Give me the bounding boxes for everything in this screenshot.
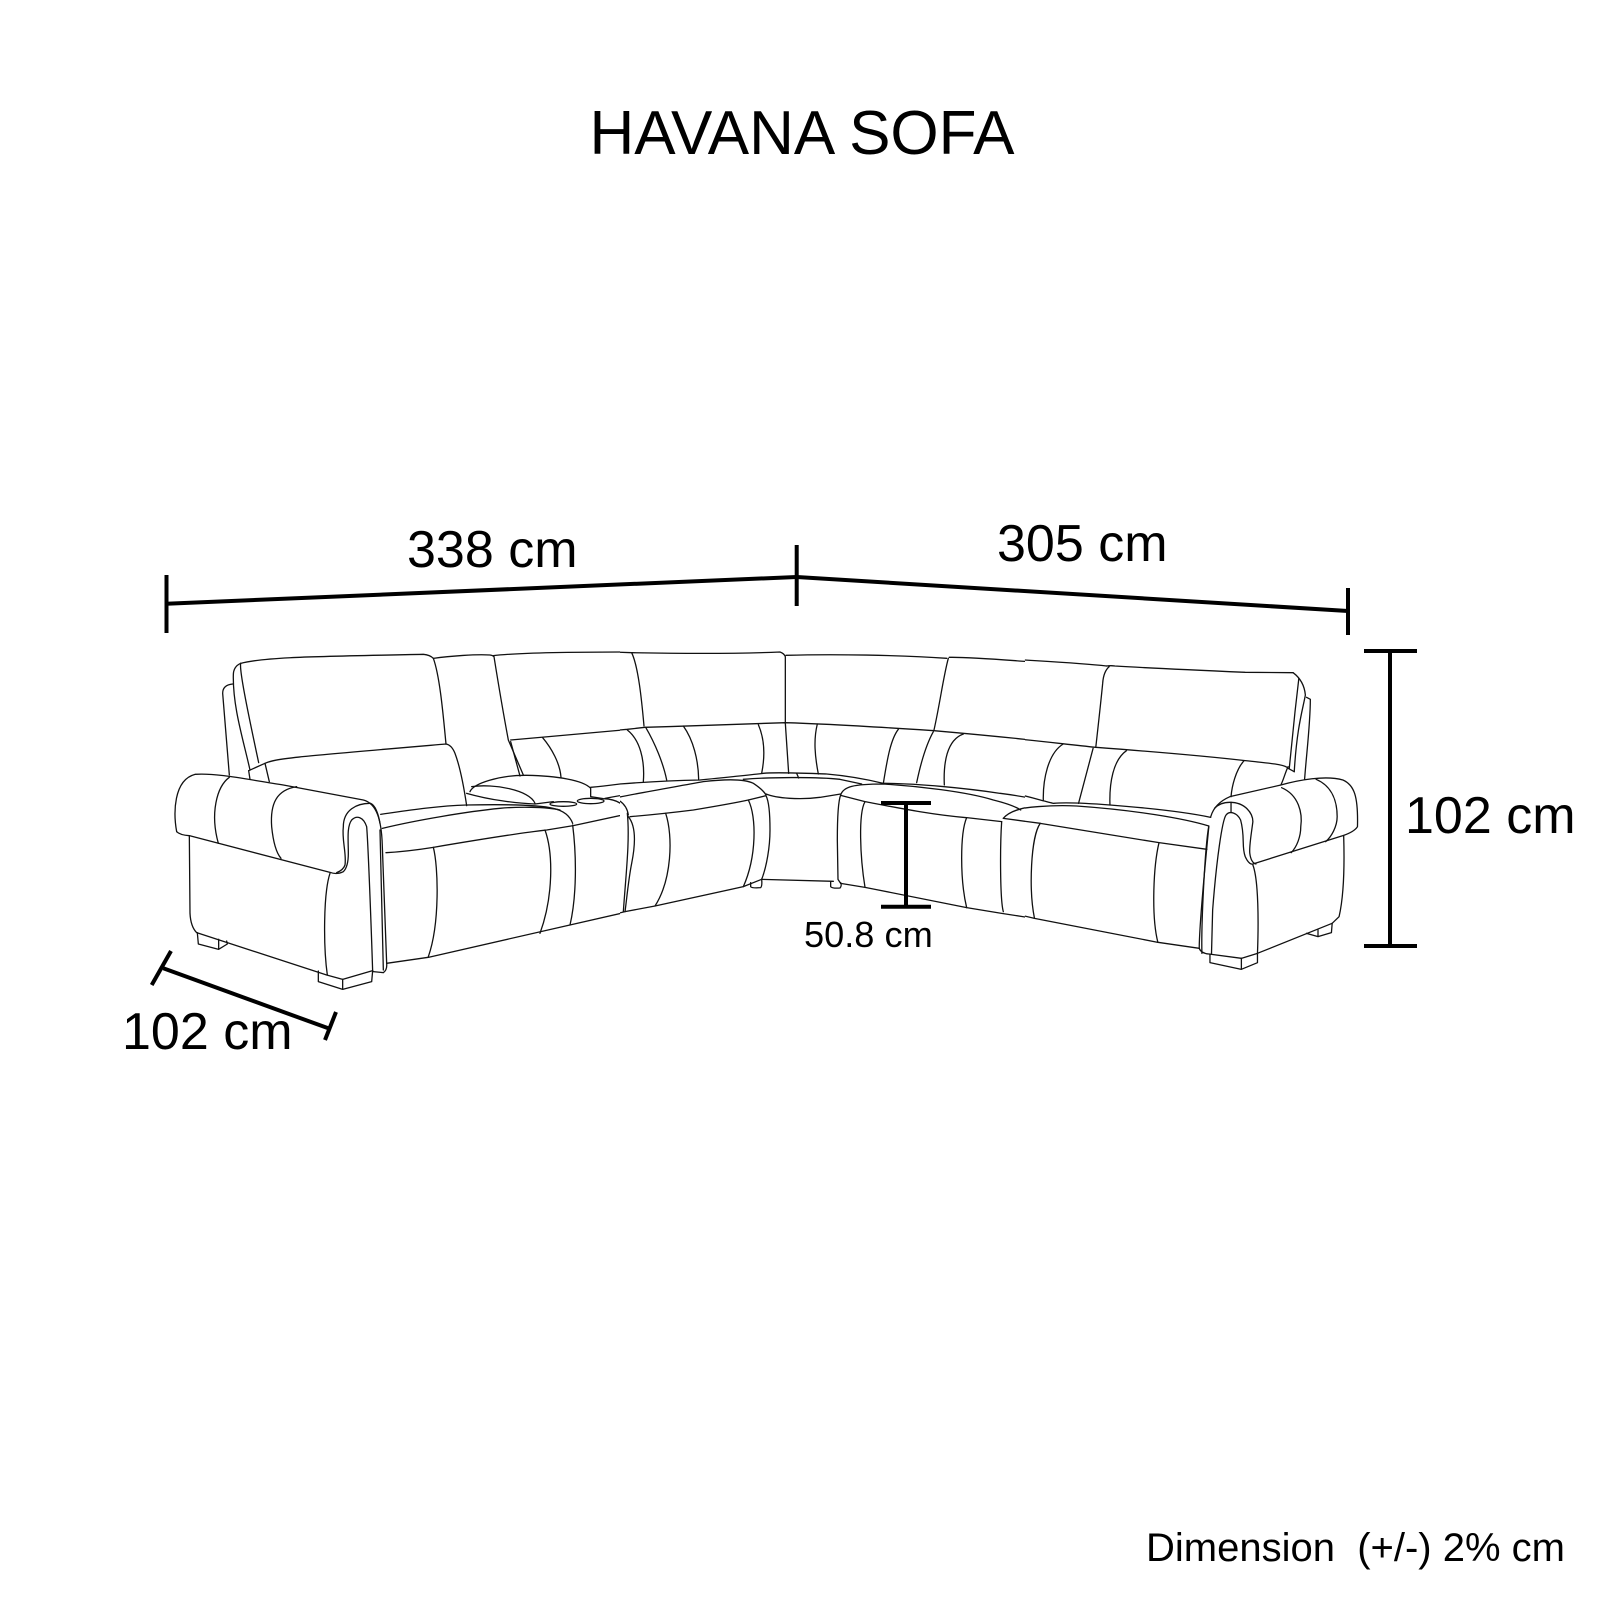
corner feet — [751, 879, 762, 888]
dimension line: seat height 50.8 cm — [881, 803, 931, 907]
title: HAVANA SOFA — [590, 99, 1015, 168]
sofa: left section with arm and console — [175, 652, 650, 989]
dimension line: 338 cm — [166, 545, 797, 633]
footnote: Dimension (+/-) 2% cm — [1146, 1526, 1565, 1570]
dimension line: height 102 cm — [1364, 651, 1417, 946]
label: depth 102 cm: 102 cm — [122, 1003, 293, 1061]
label: 50.8 cm: 50.8 cm — [804, 914, 933, 955]
cup holders — [550, 802, 577, 806]
right arm — [1199, 827, 1241, 958]
dimension line: 305 cm — [797, 577, 1348, 635]
sofa: centre corner section — [620, 651, 1025, 918]
dimension line: depth 102 cm — [152, 951, 336, 1040]
left arm — [175, 774, 387, 973]
console lid — [470, 775, 591, 796]
label: height 102 cm: 102 cm — [1405, 787, 1576, 845]
right feet — [1210, 953, 1257, 969]
sofa line drawing — [175, 652, 1358, 989]
label: 305 cm: 305 cm — [997, 515, 1168, 573]
feet — [318, 971, 373, 989]
label: 338 cm: 338 cm — [407, 521, 578, 579]
sofa: right section with arm — [1000, 658, 1358, 969]
